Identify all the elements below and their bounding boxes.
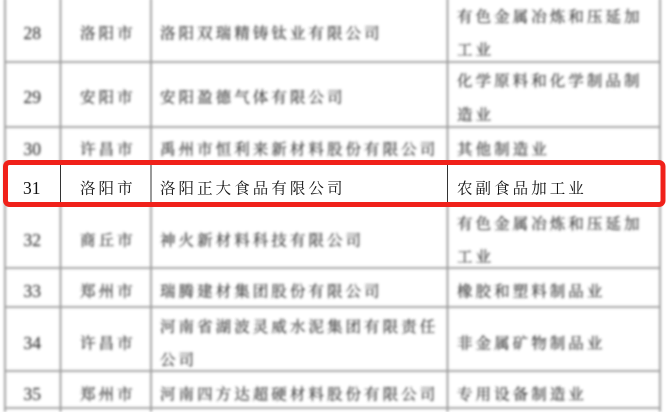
row 29: 安阳市 bbox=[80, 88, 136, 106]
row 31 city: 洛阳市 bbox=[80, 180, 136, 198]
row 34: 河南省湖波灵威水泥集团有限责任 bbox=[160, 318, 438, 336]
row 31 industry: 农副食品加工业 bbox=[457, 180, 587, 198]
row 30: 许昌市 bbox=[80, 140, 136, 158]
row 32: 32 bbox=[24, 230, 41, 250]
row 33 bbox=[24, 281, 605, 301]
row 34: 34 bbox=[24, 333, 41, 353]
row 30: 禹州市恒利来新材料股份有限公司 bbox=[160, 140, 438, 158]
row 29: 安阳盈德气体有限公司 bbox=[160, 88, 346, 106]
row 33: 33 bbox=[24, 281, 41, 301]
row 32 bbox=[24, 215, 643, 266]
row 35 bbox=[24, 384, 587, 404]
row 32: 工业 bbox=[457, 248, 494, 266]
row 32: 商丘市 bbox=[80, 232, 136, 250]
row 31 company: 洛阳正大食品有限公司 bbox=[160, 180, 346, 198]
row 32: 神火新材料科技有限公司 bbox=[160, 232, 364, 250]
highlighted row 31 bbox=[5, 160, 663, 205]
row 33: 郑州市 bbox=[80, 282, 136, 300]
row 33: 瑞腾建材集团股份有限公司 bbox=[160, 282, 383, 300]
row 33: 橡胶和塑料制品业 bbox=[457, 282, 605, 300]
row 28: 工业 bbox=[457, 41, 494, 59]
row 29: 29 bbox=[24, 87, 41, 107]
row 34: 许昌市 bbox=[80, 334, 136, 352]
row 34: 公司 bbox=[160, 351, 197, 369]
row 30 bbox=[24, 139, 550, 159]
red highlight frame bbox=[6, 162, 663, 204]
row 35: 35 bbox=[24, 384, 41, 404]
row 31 number: 31 bbox=[23, 178, 40, 198]
row 35: 河南四方达超硬材料股份有限公司 bbox=[160, 384, 438, 404]
row 29 bbox=[24, 72, 643, 124]
row 28: 28 bbox=[24, 23, 41, 43]
row 30: 其他制造业 bbox=[457, 140, 550, 158]
row 28 bbox=[24, 8, 643, 59]
row 28: 洛阳双瑞精铸钛业有限公司 bbox=[160, 24, 383, 42]
row 30: 30 bbox=[24, 139, 41, 159]
row 34: 非金属矿物制品业 bbox=[457, 334, 605, 352]
row 28: 有色金属冶炼和压延加 bbox=[457, 8, 643, 26]
row 34 bbox=[24, 318, 605, 369]
row 28: 洛阳市 bbox=[80, 24, 136, 42]
row 29: 化学原料和化学制品制 bbox=[457, 72, 643, 90]
row 29: 造业 bbox=[457, 106, 494, 124]
row 35: 郑州市 bbox=[80, 386, 136, 404]
row 35: 专用设备制造业 bbox=[457, 386, 587, 404]
row 32: 有色金属冶炼和压延加 bbox=[457, 215, 643, 233]
